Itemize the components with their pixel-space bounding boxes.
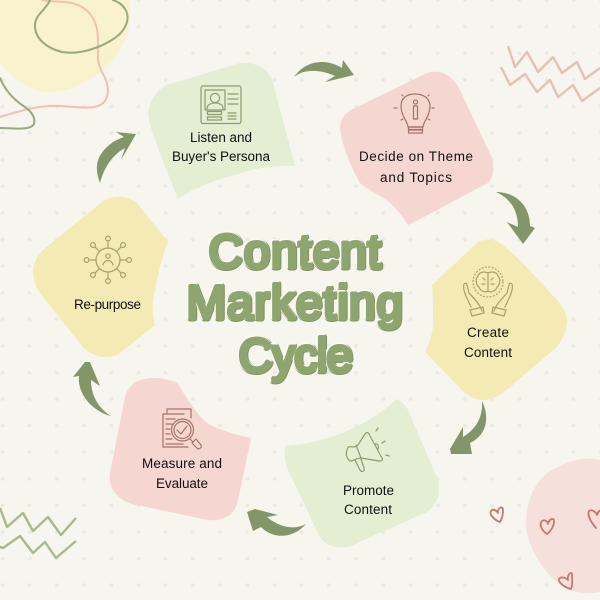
text: Decide on Theme and Topics: and Topics [380, 170, 452, 185]
title: Content Marketing Cycle: Marketing [186, 274, 402, 328]
icon: megaphone [346, 428, 389, 471]
decoration: hearts [491, 507, 600, 589]
text: Create Content [464, 325, 512, 360]
panel: Re-purpose [33, 197, 168, 357]
text: Create Content: Content [464, 345, 512, 360]
icon: persona card [201, 86, 241, 124]
decoration: top-left squiggle lines [0, 0, 128, 129]
panel: Decide on Theme and Topics [340, 72, 493, 225]
arrow: Create to Promote [450, 401, 486, 454]
arrow: Re-purpose to Listen [97, 132, 136, 183]
title: Content Marketing Cycle: Content [208, 224, 380, 276]
decoration: bottom-right pink blob [526, 458, 600, 593]
text: Create Content: Create [467, 325, 509, 340]
title: Content Marketing Cycle: Marketing [186, 276, 402, 328]
arrow: Promote to Measure [247, 509, 306, 536]
panel: Measure and Evaluate [110, 378, 251, 520]
title: Content Marketing Cycle: Marketing [186, 276, 402, 328]
icon: hands holding brain [464, 267, 512, 316]
text: Measure and Evaluate [142, 456, 222, 491]
text: Decide on Theme and Topics [359, 149, 473, 185]
panel: Listen and Buyer's Persona [148, 63, 295, 199]
text: Decide on Theme and Topics: Decide on Theme [359, 149, 473, 164]
title: Content Marketing Cycle [186, 224, 402, 382]
title: Content Marketing Cycle: Cycle [238, 328, 352, 382]
text: Promote Content: Promote [343, 483, 394, 498]
title: Content Marketing Cycle: Cycle [238, 328, 352, 382]
decoration: top-left yellow blob [0, 0, 130, 92]
text: Listen and Buyer's Persona: Buyer's Persona [172, 149, 270, 164]
text: Measure and Evaluate: Evaluate [156, 476, 208, 491]
text: Promote Content: Content [344, 502, 392, 517]
title: Content Marketing Cycle: Cycle [238, 328, 352, 380]
icon: document and magnifier [163, 409, 201, 449]
title: Content Marketing Cycle: Content [208, 224, 380, 278]
text: Re-purpose: Re-purpose [74, 297, 141, 312]
title: Content Marketing Cycle: Content [208, 224, 380, 278]
panel: Promote Content [285, 399, 439, 547]
text: Listen and Buyer's Persona: Listen and [190, 130, 252, 145]
text: Listen and Buyer's Persona [172, 130, 270, 164]
icon: light bulb [394, 94, 434, 133]
icon: network around person [84, 236, 131, 283]
text: Measure and Evaluate: Measure and [142, 456, 222, 471]
decoration: green zigzag lines [0, 508, 76, 558]
arrow: Decide to Create [496, 192, 535, 244]
arrow: Measure to Re-purpose [73, 362, 111, 416]
decoration: pink zigzag lines [501, 46, 600, 101]
text: Promote Content [343, 483, 394, 517]
arrow: Listen to Decide [294, 60, 354, 82]
panel: Create Content [425, 239, 567, 400]
